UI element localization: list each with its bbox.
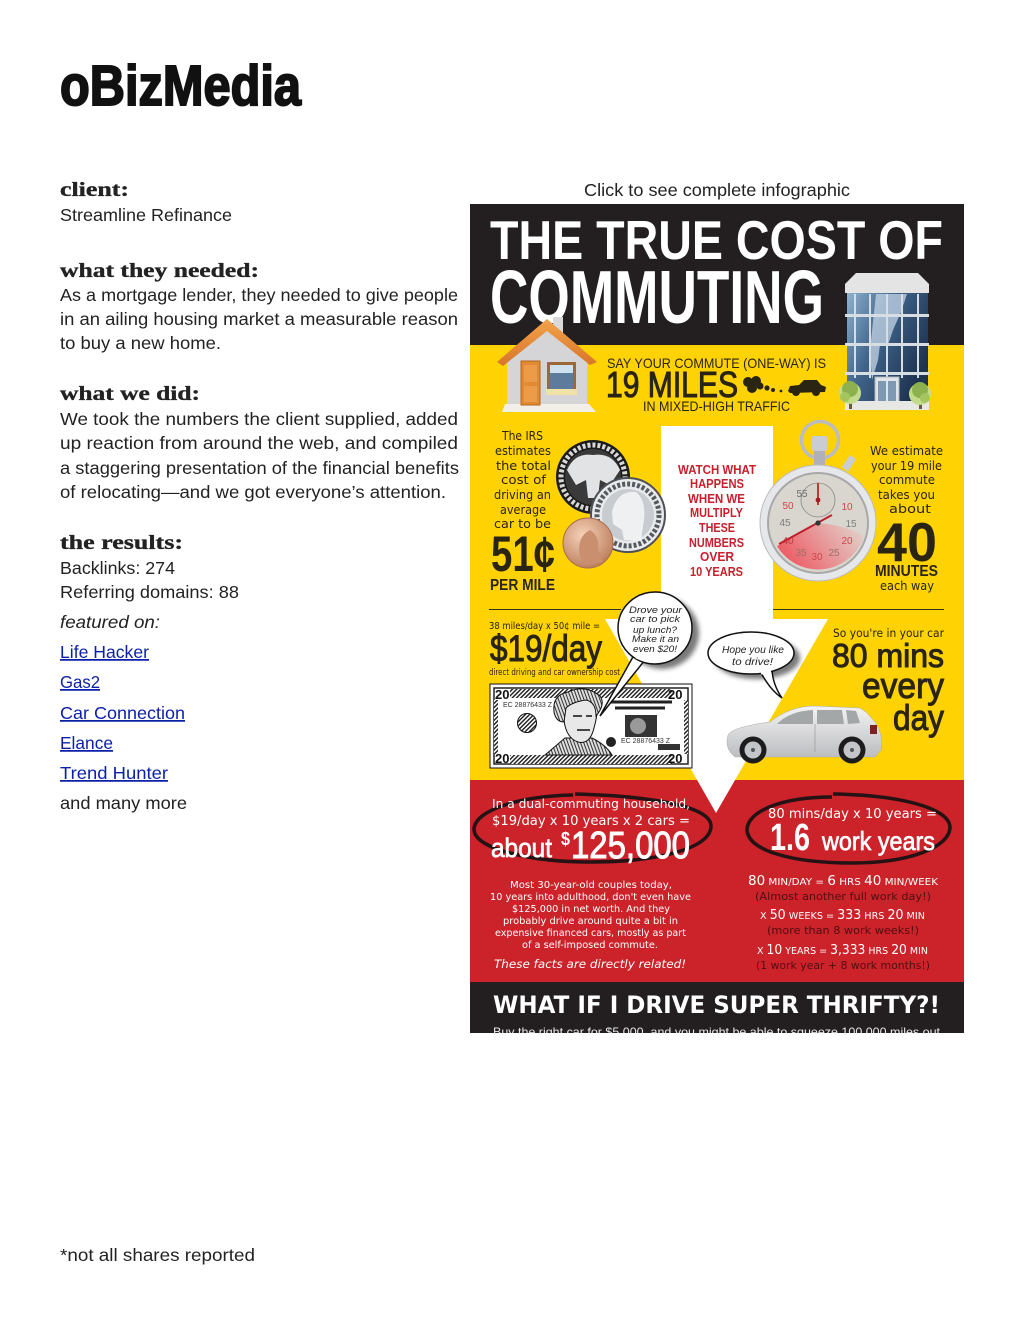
text: time breakdown: (more than 8 work weeks!) [767,924,919,937]
title: THE TRUE COST OF [490,209,943,271]
links list: Elance [60,733,113,753]
text: net worth paragraph: $125,000 in net worth. And they [512,904,670,915]
icon: coins [556,440,665,568]
text: 19 dollars a day: 38 miles/day x 50¢ mile = [489,621,600,632]
text: watch what happens: WHEN WE [688,492,745,506]
links list: Trend Hunter [60,763,168,783]
text: 80 mins every day: So you're in your car [833,626,944,640]
divider lines [489,609,944,610]
icon: twenty dollar bill: 20 [495,687,509,702]
clipped body text: Buy the right car for $5,000, and you might be able to squeeze 100,000 miles out [493,1025,941,1039]
links list: Life Hacker [60,642,149,662]
speech bubble: lunch [600,592,699,716]
text: IRS estimate: estimates [495,443,551,458]
text: watch what happens: NUMBERS [689,536,744,550]
text: net worth paragraph [490,880,691,971]
speech bubble: lunch: Make it an [632,634,679,645]
links list [60,642,185,783]
text: watch what happens: OVER [700,550,734,564]
icon: stopwatch: 20 [841,536,853,547]
text: watch what happens: THESE [699,521,735,535]
icon: twenty dollar bill: EC 28876433 Z [503,702,553,709]
text: 80 mins every day: 80 mins [832,637,944,674]
title [490,220,942,324]
heading: what if I drive super thrifty: WHAT IF I DRIVE SUPER THRIFTY?! [493,991,940,1019]
circled callout: 125,000: $19/day x 10 years x 2 cars = [492,813,690,829]
text: time breakdown: (1 work year + 8 work months!) [756,959,930,972]
text: time breakdown [748,874,938,972]
panel: red section [470,780,964,982]
text: IRS estimate: driving an [494,487,551,502]
text: net worth paragraph: expensive financed cars, mostly as part [495,928,686,939]
text: estimate 40 minutes: each way [880,578,935,593]
links list: Gas2 [60,672,100,692]
speech bubble: lunch: even $20! [633,644,677,655]
text: net worth paragraph: 10 years into adulthood, don't even have [490,892,691,903]
footnote: *not all shares reported [60,1245,255,1265]
text: IRS estimate [490,428,555,594]
text block: results: Backlinks: 274 [60,558,175,578]
icon: silver car [727,706,882,764]
text block: results: Referring domains: 88 [60,582,239,602]
case study text column [60,179,459,813]
closing note: and many more [60,793,187,813]
text: say your commute: SAY YOUR COMMUTE (ONE-WAY) IS [607,355,826,371]
text: IRS estimate: PER MILE [490,577,555,594]
heading: client: client: [60,179,129,201]
text: net worth paragraph: of a self-imposed commute. [522,940,658,951]
icon: office building [845,273,929,410]
text block: results [60,558,239,632]
text block: what we did: of relocating—and we got everyone’s attention. [60,482,446,502]
text: 19 dollars a day: direct driving and car ownership cost [489,668,621,678]
text block: what we did: We took the numbers the client supplied, added [60,409,458,429]
text: say your commute: 19 MILES [606,364,738,405]
circled callout: 125,000: about [491,833,552,863]
text: estimate 40 minutes: takes you [878,487,935,502]
circled callout: 1.6 work years: 80 mins/day x 10 years = [768,807,937,822]
icon: stopwatch: 40 [782,536,794,547]
text: IRS estimate: the total [496,458,551,473]
text: net worth paragraph: Most 30-year-old couples today, [510,880,672,891]
text: 19 dollars a day: $19/day [490,628,602,669]
speech bubble: hope you like to drive [708,632,800,698]
text: time breakdown: (Almost another full work day!) [755,890,931,903]
text: estimate 40 minutes: commute [879,472,935,487]
icon: stopwatch: 15 [845,519,857,530]
text block: what they needed [60,285,458,353]
speech bubble: lunch: car to pick [630,614,681,625]
caption above infographic: Click to see complete infographic [584,180,850,200]
icon: stopwatch: 55 [796,489,808,500]
hand-drawn ellipse [474,794,711,862]
speech bubble: hope you like to drive: Hope you like [722,645,784,656]
title: COMMUTING [490,255,824,339]
text: say your commute [608,358,826,411]
icon: stopwatch: 45 [779,518,791,529]
text block: what they needed: in an ailing housing market a measurable reason [60,309,458,329]
text block: what they needed: As a mortgage lender, they needed to give people [60,285,458,305]
logo: oBizMedia: oBizMedia [60,54,302,118]
icon: stopwatch: 50 [782,501,794,512]
text: IRS estimate: cost of [501,472,547,487]
icon: stopwatch [760,422,876,581]
text block: what we did [60,409,459,502]
hand-drawn ellipse [747,794,950,863]
icon: twenty dollar bill: EC 28876433 Z [621,738,671,745]
text: estimate 40 minutes: We estimate [870,443,943,458]
circled callout: 1.6 work years: work years [821,826,935,856]
circled callout: 1.6 work years [747,794,950,863]
text: estimate 40 minutes: about [889,501,931,516]
circled callout: 125,000: 125,000 [571,825,690,867]
panel: bottom band [470,982,964,1033]
icon: house [497,317,597,412]
icon: twenty dollar bill: 20 [668,687,682,702]
icon: trees [839,381,931,409]
circled callout: 125,000 [474,794,711,867]
heading: the results: the results: [60,532,183,554]
text: time breakdown: X 50 WEEKS = 333 HRS 20 MIN [760,908,925,923]
icon: stopwatch: 10 [841,502,853,513]
text block: what we did: a staggering presentation of the financial benefits [60,458,459,478]
circled callout: 125,000: $ [561,829,570,849]
icon: stopwatch: 30 [811,552,823,563]
text block: what they needed: to buy a new home. [60,333,221,353]
text: 80 mins every day: day [893,697,944,738]
text: watch what happens: HAPPENS [690,477,744,491]
heading: what we did: what we did: [60,383,200,405]
heading: what they needed: what they needed: [60,260,259,282]
panel: yellow section [470,345,964,780]
panel: title band [470,204,964,345]
text: watch what happens: 10 YEARS [690,565,743,579]
speech bubble: hope you like to drive: to drive! [732,657,773,668]
text: estimate 40 minutes: your 19 mile [871,458,942,473]
circled callout: 1.6 work years: 1.6 [770,817,810,859]
text: net worth paragraph: These facts are directly related! [494,957,686,971]
arrow: big white down arrow [605,426,828,813]
text: IRS estimate: average [500,502,546,517]
text: watch what happens [678,463,756,579]
icon: car exhaust and silhouette [743,376,826,396]
text: estimate 40 minutes: MINUTES [875,563,938,580]
speech bubble: lunch: Drove your [629,605,683,616]
text: watch what happens: MULTIPLY [690,506,744,520]
panel: infographic [470,204,964,1039]
text: say your commute: IN MIXED-HIGH TRAFFIC [643,398,790,414]
text: net worth paragraph: probably drive around quite a bit in [503,916,678,927]
icon: stopwatch: 35 [795,548,807,559]
text: watch what happens: WATCH WHAT [678,463,756,477]
icon: twenty dollar bill [490,684,692,768]
text: IRS estimate: 51¢ [491,526,555,582]
icon: twenty dollar bill: 20 [495,751,509,766]
links list: Car Connection [60,703,185,723]
text: estimate 40 minutes: 40 [877,511,937,573]
text block: what we did: up reaction from around the web, and compiled [60,433,458,453]
text: time breakdown: 80 MIN/DAY = 6 HRS 40 MIN/WEEK [748,874,938,889]
text: time breakdown: X 10 YEARS = 3,333 HRS 20 MIN [757,943,928,958]
speech bubble: lunch: up lunch? [633,625,678,636]
text block: results: featured on: [60,612,160,632]
icon: stopwatch: 25 [828,548,840,559]
text: IRS estimate: car to be [494,516,551,531]
icon: twenty dollar bill: 20 [668,751,682,766]
text: 80 mins every day: every [862,665,944,706]
text: estimate 40 minutes [870,443,943,593]
client name: Streamline Refinance [60,205,232,225]
text: 80 mins every day [832,626,944,738]
circled callout: 125,000: In a dual-commuting household, [492,796,690,811]
text: IRS estimate: The IRS [501,428,543,443]
